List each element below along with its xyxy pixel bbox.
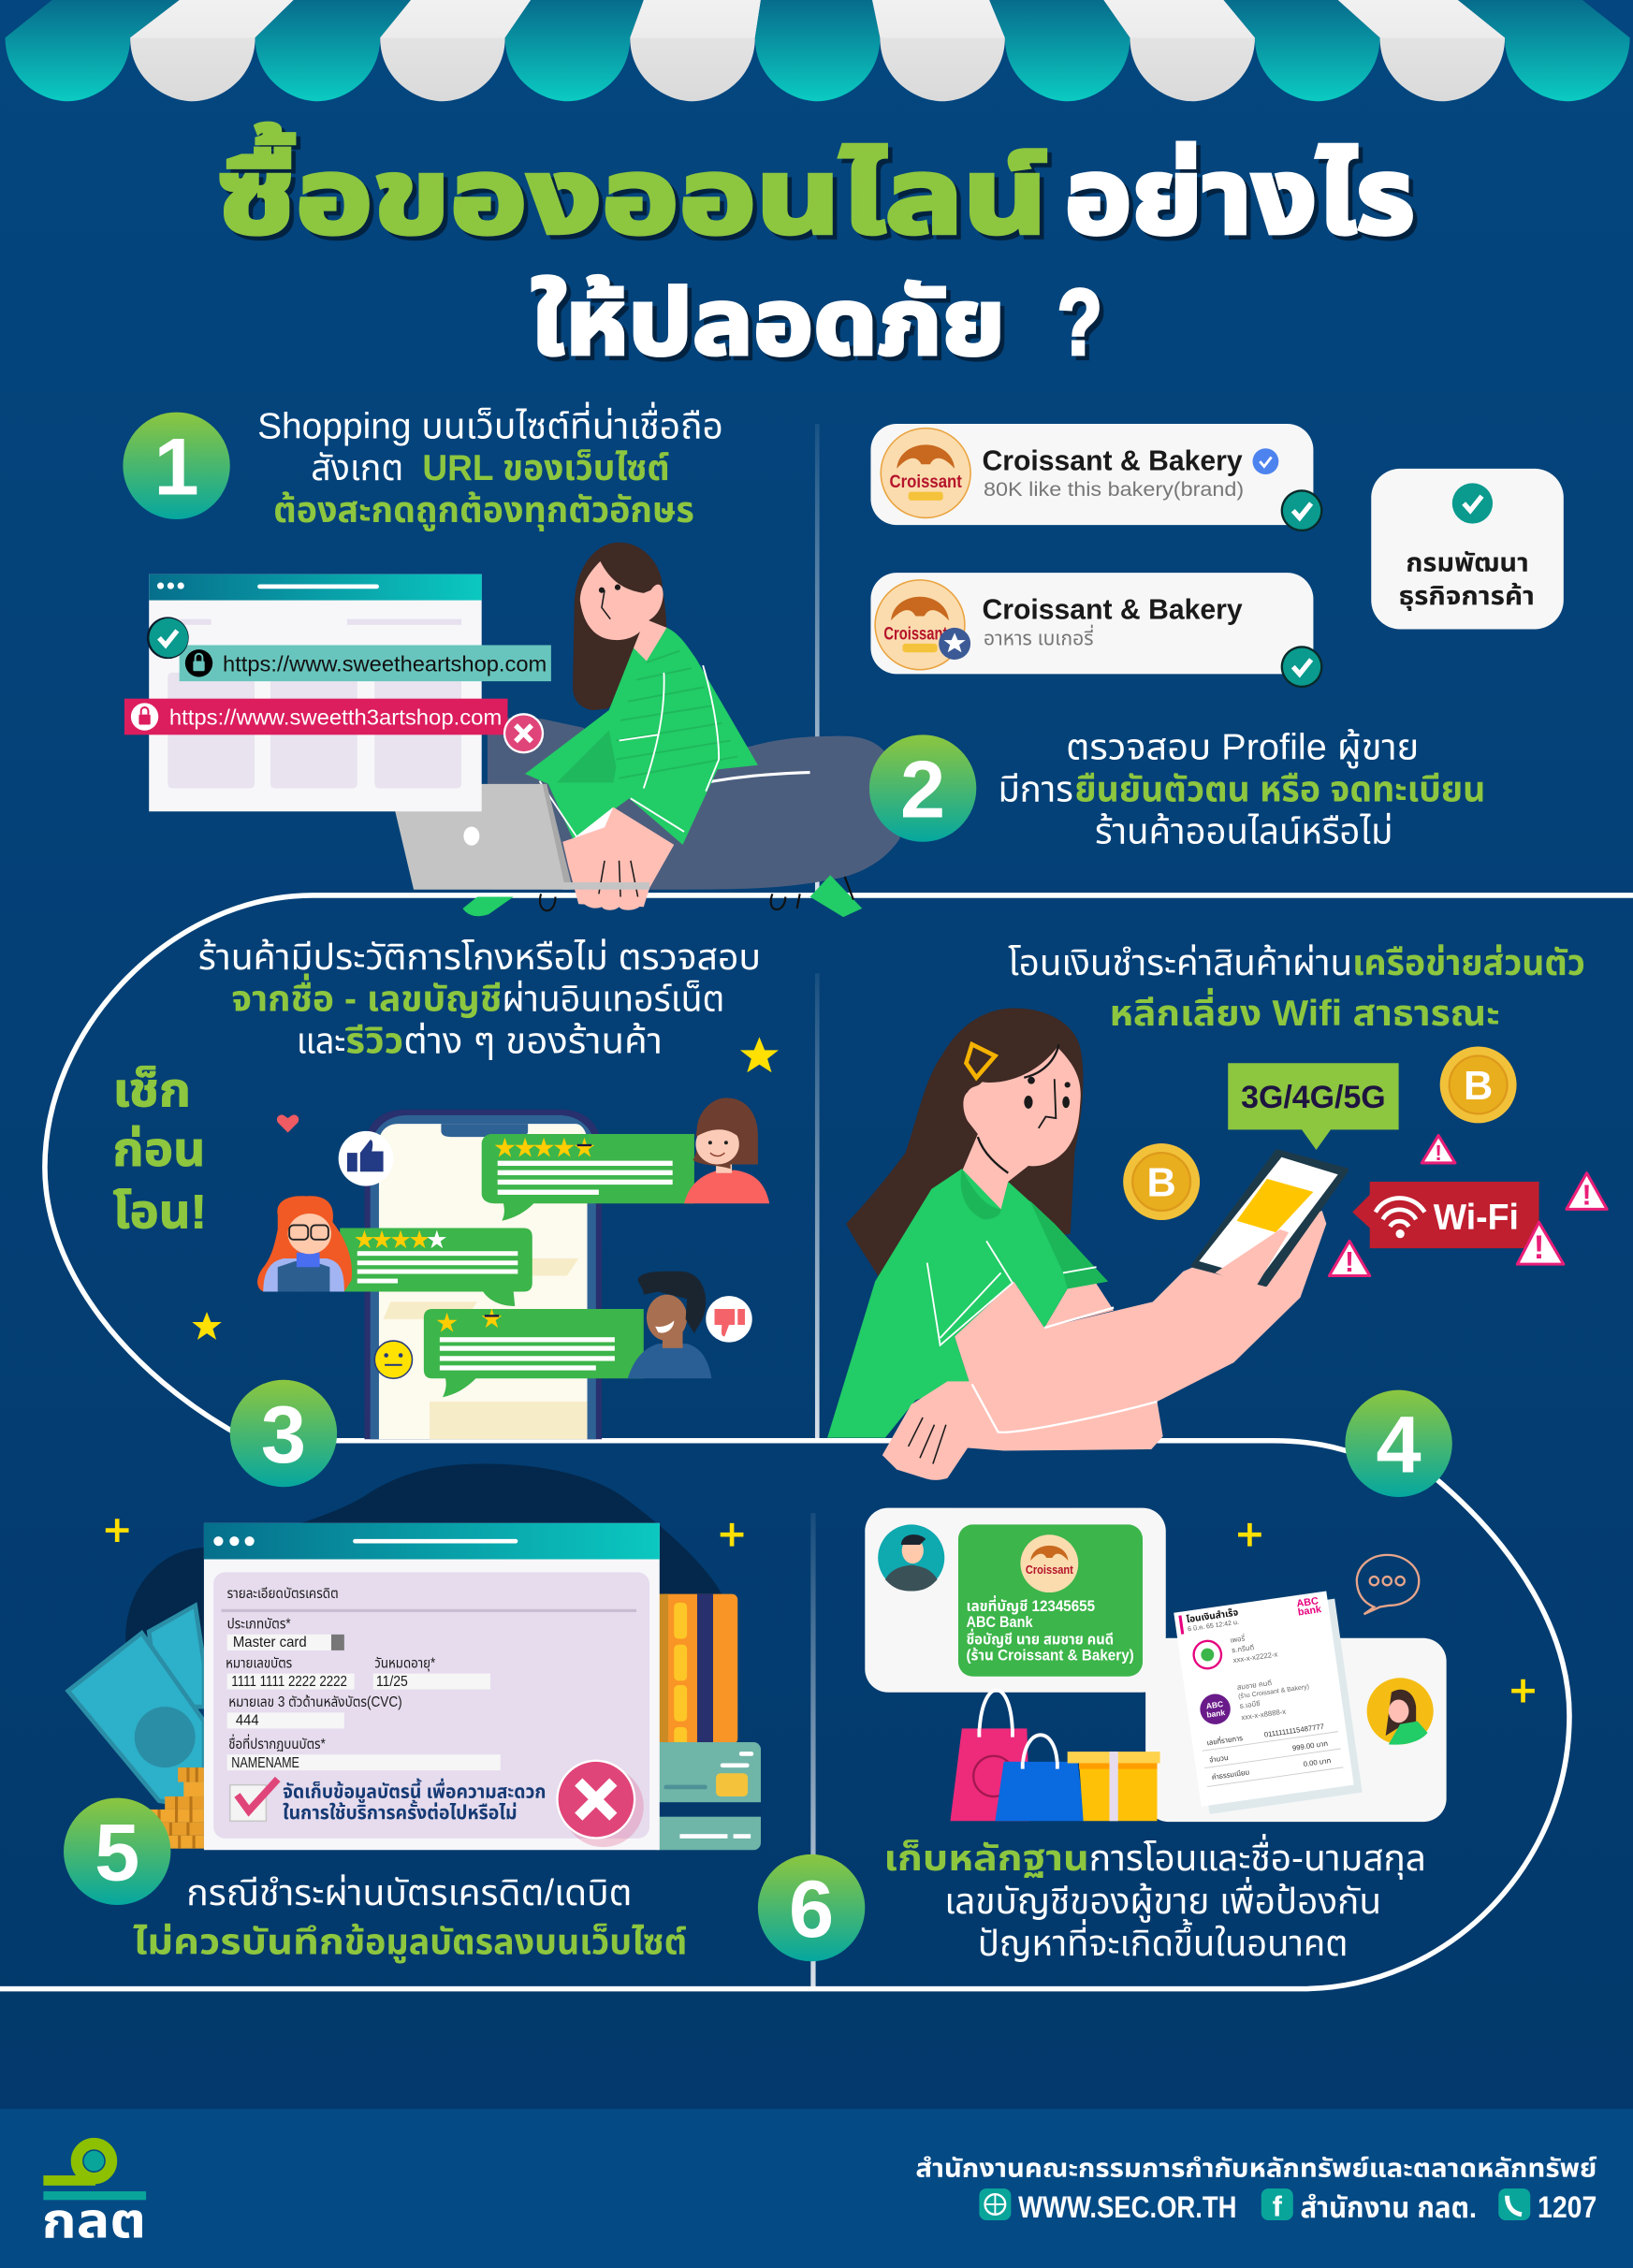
save card question: จัดเก็บข้อมูลบัตรนี้ เพื่อความสะดวก	[283, 1778, 546, 1803]
panel: DBD badge: กรมพัฒนา	[1406, 548, 1529, 577]
slogan: check before transfer: เช็ก	[113, 1064, 191, 1117]
review bubble: four stars	[482, 1134, 694, 1221]
hair clip	[966, 1044, 995, 1078]
transfer slip: ABC	[1296, 1595, 1320, 1609]
transfer slip: bank	[1297, 1604, 1323, 1619]
step 4 number	[1345, 1390, 1452, 1497]
title: ให้ปลอดภัย	[531, 270, 1005, 374]
footer contact text: สำนักงานคณะกรรมการกำกับหลักทรัพย์และตลาดหลักทรัพย์	[915, 2154, 1597, 2183]
transfer slip: (ร้าน Croissant & Bakery)	[1238, 1683, 1309, 1700]
transfer slip: จำนวน	[1209, 1753, 1229, 1765]
logo: croissant	[875, 580, 965, 670]
review bubble: four stars: ★	[409, 1228, 430, 1252]
text: step 5: ข้อมูลบัตรลงบนเว็บไซต์	[344, 1923, 687, 1964]
panel: registered profile card: Croissant & Bakery	[982, 593, 1243, 626]
illustration: bank transfer chat	[865, 1508, 1447, 1822]
icon: thumbs down	[706, 1296, 752, 1343]
form fields	[226, 1586, 501, 1771]
icon: bitcoin: B	[1464, 1064, 1493, 1109]
icon: thumbs up	[339, 1131, 393, 1186]
form fields: รายละเอียดบัตรเครดิต	[227, 1586, 339, 1602]
callout: Wi-Fi warning: Wi-Fi	[1434, 1198, 1519, 1238]
review bubble: four stars: ★	[427, 1228, 447, 1252]
text: step 5: ไม่ควรบันทึก	[133, 1923, 344, 1963]
review bubble: four stars: ★	[390, 1228, 411, 1252]
text: step 3	[198, 938, 761, 1061]
icon: bitcoin	[1440, 1046, 1517, 1123]
illustration: phone with reviews	[257, 1098, 769, 1439]
slogan: check before transfer: ก่อน	[113, 1123, 205, 1176]
icon: check	[147, 617, 189, 659]
save card question: ในการใช้บริการครั้งต่อไปหรือไม่	[283, 1800, 518, 1824]
form fields: ชื่อที่ปรากฏบนบัตร*	[228, 1734, 326, 1752]
footer contact text: 1207	[1538, 2190, 1597, 2224]
text: step 4: หลีกเลี่ยง Wifi สาธารณะ	[1109, 987, 1500, 1034]
URL bar: fake: https://www.sweetth3artshop.com	[169, 705, 502, 730]
logo: croissant: Croissant	[883, 624, 948, 644]
step 1 number: 1	[153, 423, 199, 513]
awning	[6, 0, 1630, 101]
transfer slip: สมชาย คนดี	[1236, 1679, 1273, 1692]
slogan: check before transfer: โอน!	[113, 1185, 207, 1238]
text: step 2: ร้านค้าออนไลน์หรือไม่	[1095, 811, 1392, 851]
text: step 3: ต่าง ๆ ของร้านค้า	[403, 1021, 663, 1061]
form fields: ประเภทบัตร*	[227, 1617, 291, 1633]
panel: step 1 illustration, girl with laptop	[395, 543, 901, 907]
URL bar: genuine	[180, 645, 551, 681]
logo: croissant	[881, 429, 970, 517]
text: step 1: ต้องสะกดถูกต้องทุกตัวอักษร	[273, 490, 694, 531]
footer band	[0, 2109, 1633, 2268]
icon: cross	[556, 1760, 644, 1847]
transfer slip: bank	[1206, 1708, 1226, 1720]
bank account box: เลขที่บัญชี 12345655	[966, 1595, 1095, 1615]
transfer slip: 6 มิ.ค. 65 12:42 น.	[1188, 1620, 1240, 1633]
transfer slip: ABC	[1205, 1699, 1224, 1710]
person: reviewer woman	[684, 1098, 769, 1203]
title: ?	[1057, 270, 1102, 374]
transfer slip: ธ.กรีนดี	[1232, 1643, 1255, 1654]
title	[217, 124, 1415, 374]
URL bar: genuine: https://www.sweetheartshop.com	[223, 651, 547, 676]
icon: phone	[1498, 2188, 1530, 2220]
person: reviewer with red hair	[257, 1196, 352, 1292]
bank account box	[958, 1524, 1143, 1677]
plus marks	[106, 1519, 1535, 1703]
logo: croissant: Croissant	[890, 472, 962, 492]
callout: 3G/4G/5G	[1228, 1063, 1399, 1150]
step 6 number: 6	[789, 1865, 834, 1955]
icon: cross	[503, 713, 544, 753]
icon: globe	[979, 2188, 1011, 2220]
money	[68, 1606, 204, 1808]
step 6 number	[758, 1854, 865, 1961]
text: step 3: รีวิว	[345, 1021, 403, 1061]
step 4 number: 4	[1377, 1401, 1422, 1490]
teal card	[651, 1742, 761, 1850]
callout: 3G/4G/5G: 3G/4G/5G	[1241, 1080, 1386, 1115]
text: step 4: โอนเงินชำระค่าสินค้าผ่าน	[1008, 943, 1352, 983]
decorative stars	[192, 1037, 779, 1340]
browser window with URLs	[124, 574, 551, 811]
transfer slip: โอนเงินสำเร็จ	[1186, 1606, 1239, 1625]
phone	[1193, 1152, 1347, 1287]
logo: croissant	[1020, 1534, 1078, 1592]
text: step 2: มีการ	[998, 769, 1073, 809]
text: step 2: ยืนยันตัวตน หรือ จดทะเบียน	[1074, 769, 1485, 809]
transfer slip: 0.00 บาท	[1303, 1756, 1332, 1768]
warning icons: !	[1345, 1245, 1354, 1278]
slogan: check before transfer	[113, 1064, 207, 1238]
orange card	[658, 1594, 737, 1744]
divider lines and road frame	[0, 424, 1633, 1989]
text: step 3: ร้านค้ามีประวัติการโกงหรือไม่ ตรวจสอบ	[198, 938, 761, 978]
form fields: หมายเลข 3 ตัวด้านหลังบัตร(CVC)	[228, 1694, 402, 1710]
review bubble: four stars: ★	[494, 1136, 516, 1160]
transfer slip: 0111111115487777	[1263, 1723, 1325, 1739]
panel: registered profile card: อาหาร เบเกอรี่	[984, 624, 1094, 649]
warning icons: !	[1582, 1179, 1592, 1212]
title: ซื้อของออนไลน์	[217, 124, 1047, 255]
panel: verified profile card: Croissant & Bakery	[982, 443, 1243, 476]
step 5 number	[64, 1798, 170, 1905]
footer contact text	[915, 2154, 1597, 2224]
icon: facebook: f	[1273, 2189, 1283, 2222]
review bubble: four stars: ★	[372, 1228, 392, 1252]
logo: SEC: กลต	[42, 2194, 146, 2249]
step 3 number: 3	[261, 1390, 306, 1480]
text: step 4	[1008, 943, 1585, 1034]
text: step 6: ปัญหาที่จะเกิดขึ้นในอนาคต	[978, 1919, 1349, 1964]
text: step 6: เก็บหลักฐาน	[883, 1839, 1089, 1879]
browser window	[204, 1523, 660, 1850]
transfer slip: ค่าธรรมเนียม	[1211, 1767, 1250, 1781]
text: step 2: ตรวจสอบ Profile ผู้ขาย	[1066, 728, 1419, 769]
review bubble: one star: ★	[436, 1311, 458, 1335]
review bubble: four stars: ★	[574, 1136, 595, 1160]
panel: registered profile card	[870, 573, 1322, 688]
text: step 3: และ	[297, 1021, 345, 1061]
person: reviewer man	[628, 1272, 711, 1378]
checkbox	[230, 1779, 278, 1821]
review bubble: one star	[424, 1307, 644, 1397]
transfer slip: ธ.เอบีซี	[1239, 1699, 1261, 1710]
form fields: 1111 1111 2222 2222	[231, 1674, 347, 1690]
icon: check	[1281, 489, 1322, 531]
logo: croissant: Croissant	[1026, 1563, 1073, 1577]
title: อย่างไร	[1065, 138, 1415, 255]
transfer slip: 999.00 บาท	[1291, 1739, 1329, 1752]
step 3 number	[230, 1380, 337, 1487]
review bubble: four stars: ★	[355, 1228, 374, 1252]
text: step 1: Shopping บนเว็บไซต์ที่น่าเชื่อถือ	[257, 401, 723, 446]
coins	[139, 1767, 204, 1849]
bank account box: ชื่อบัญชี นาย สมชาย คนดี	[966, 1629, 1114, 1649]
bank account box: ABC Bank	[966, 1614, 1033, 1631]
text: step 3: ผ่านอินเทอร์เน็ต	[502, 980, 724, 1020]
form fields: วันหมดอายุ*	[374, 1655, 435, 1671]
text: step 1: สังเกต	[311, 448, 403, 488]
transfer slip: xxx-x-x8888-x	[1241, 1708, 1287, 1722]
icon: speech bubble	[1357, 1555, 1419, 1614]
review bubble: four stars: ★	[533, 1136, 555, 1160]
form fields: Master card	[233, 1635, 307, 1650]
icon: heart	[277, 1115, 299, 1132]
review bubble: four stars: ★	[514, 1136, 536, 1160]
text: step 6	[883, 1834, 1426, 1964]
icon: bitcoin	[1123, 1143, 1200, 1220]
panel: verified profile card	[870, 424, 1322, 531]
form fields: หมายเลขบัตร	[226, 1655, 292, 1671]
avatar: man	[878, 1524, 944, 1592]
transfer slip	[1174, 1590, 1363, 1815]
feet below road line	[463, 875, 862, 917]
text: step 6: การโอนและชื่อ-นามสกุล	[1089, 1834, 1426, 1880]
illustration: credit card form	[68, 1463, 761, 1850]
illustration: girl holding phone	[827, 1009, 1347, 1480]
step 2 number	[869, 734, 976, 842]
footer contact text: สำนักงาน กลต.	[1301, 2191, 1477, 2224]
icon: neutral face	[374, 1341, 413, 1378]
step 5 number: 5	[95, 1809, 139, 1898]
form fields: NAMENAME	[231, 1755, 299, 1771]
review bubble: four stars: ★	[553, 1136, 575, 1160]
panel: verified profile card: 80K like this bakery(brand)	[984, 477, 1244, 501]
step 2 number: 2	[900, 745, 945, 835]
text: step 1	[257, 401, 723, 531]
footer contact text: WWW.SEC.OR.TH	[1018, 2190, 1237, 2224]
save card question	[283, 1778, 546, 1824]
text: step 5	[133, 1873, 687, 1964]
panel: DBD badge	[1371, 469, 1564, 629]
shopping bags	[950, 1690, 1160, 1821]
logo: SEC	[42, 2144, 146, 2249]
text: step 6: เลขบัญชีของผู้ขาย เพื่อป้องกัน	[944, 1877, 1381, 1923]
warning icons	[1329, 1136, 1607, 1278]
bank account box: (ร้าน Croissant & Bakery)	[966, 1648, 1134, 1665]
panel: DBD badge: ธุรกิจการค้า	[1399, 581, 1535, 611]
transfer slip: เพอรี่	[1230, 1633, 1246, 1645]
icon: bitcoin: B	[1147, 1160, 1176, 1205]
URL bar: fake	[124, 699, 508, 734]
icon: check	[1281, 646, 1322, 688]
warning icons: !	[1534, 1228, 1544, 1266]
text: step 1: URL ของเว็บไซต์	[422, 448, 670, 488]
text: step 5: กรณีชำระผ่านบัตรเครดิต/เดบิต	[186, 1873, 632, 1913]
text: step 4: เครือข่ายส่วนตัว	[1352, 943, 1585, 983]
avatar: woman	[1367, 1678, 1434, 1745]
text: step 3: จากชื่อ - เลขบัญชี	[231, 973, 502, 1020]
icon: facebook	[1261, 2188, 1293, 2222]
step 1 number	[123, 413, 230, 519]
review bubble: four stars	[340, 1228, 532, 1306]
callout: Wi-Fi warning	[1352, 1182, 1539, 1248]
form fields: 11/25	[376, 1674, 408, 1690]
review bubble: one star: ★	[481, 1307, 503, 1331]
form fields: 444	[236, 1713, 259, 1729]
transfer slip: เลขที่รายการ	[1206, 1733, 1244, 1747]
text: step 2	[998, 728, 1485, 851]
warning icons: !	[1435, 1141, 1442, 1165]
transfer slip: xxx-x-x2222-x	[1232, 1650, 1278, 1665]
